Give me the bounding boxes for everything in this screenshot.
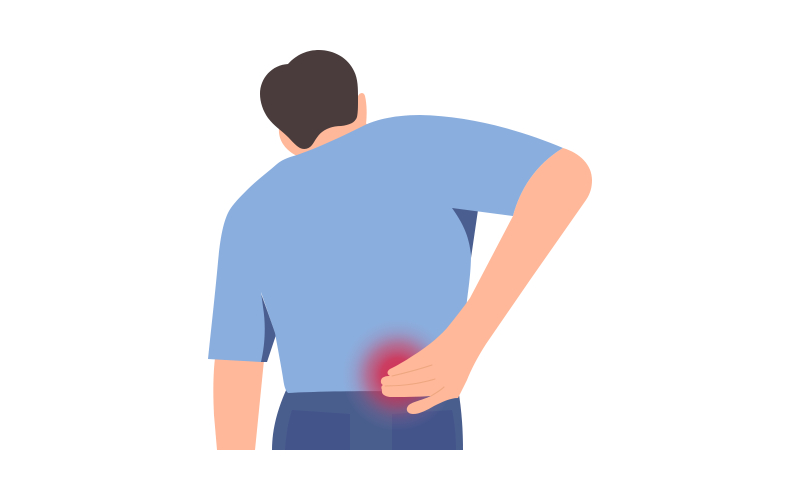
left forearm	[213, 358, 264, 450]
pain glow	[342, 319, 454, 431]
hair	[260, 50, 358, 149]
jeans	[272, 388, 463, 450]
finger creases	[385, 365, 444, 396]
neck and ear	[279, 93, 370, 156]
t-shirt	[208, 115, 563, 393]
dark undershirt by left sleeve	[259, 288, 276, 362]
dark undershirt by right side	[450, 205, 478, 258]
right arm and hand	[381, 148, 592, 414]
